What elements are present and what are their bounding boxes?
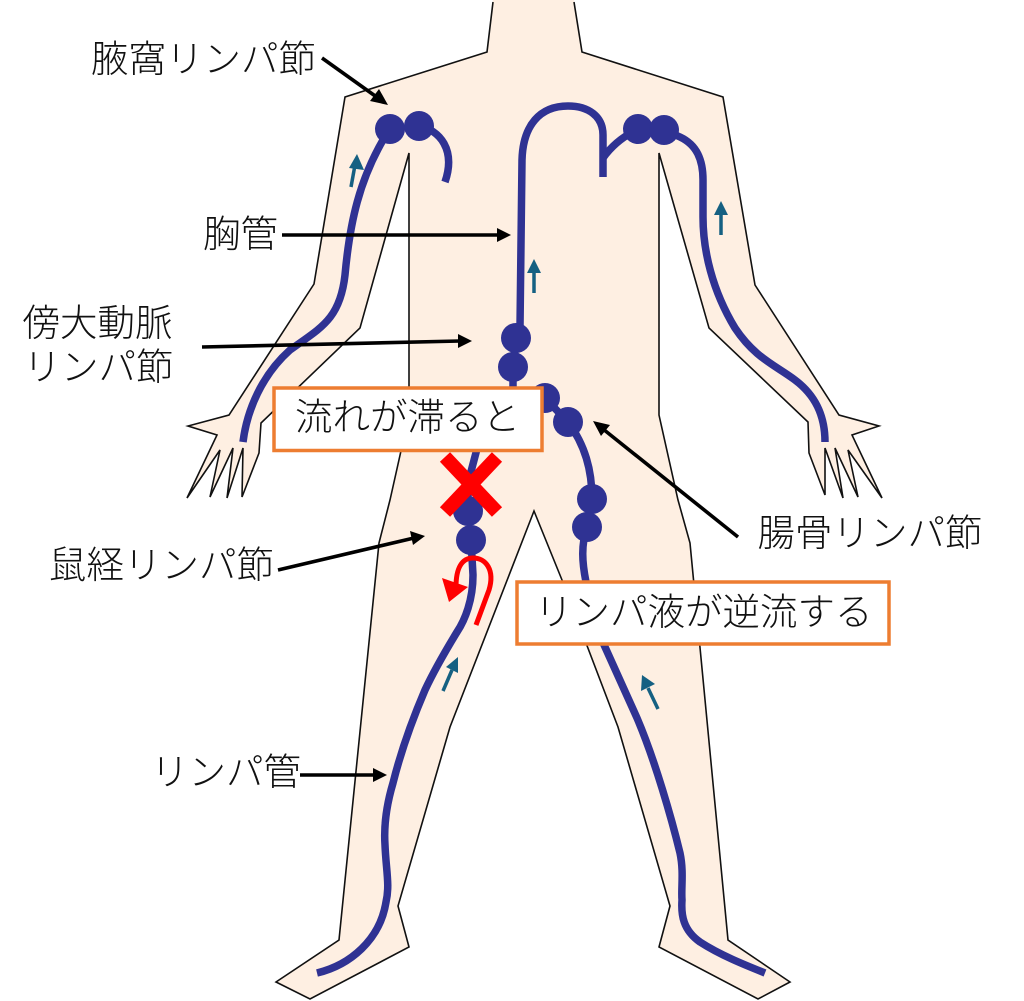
label: thoracic duct: 胸管	[203, 213, 278, 255]
leader arrow: para-aortic nodes	[202, 334, 472, 348]
callout: lymph backflow	[517, 582, 889, 644]
leader arrow: thoracic duct	[282, 228, 511, 242]
label: para-aortic lymph nodes: リンパ節	[24, 346, 174, 388]
red backflow arrow	[442, 558, 491, 625]
flow arrows	[349, 154, 728, 709]
red X: blockage	[445, 457, 497, 512]
label: axillary lymph nodes: 腋窩リンパ節	[91, 38, 316, 80]
lymph vessels	[243, 106, 825, 973]
lymph nodes	[375, 111, 679, 555]
callout: when flow stagnates: 流れが滞ると	[295, 396, 520, 438]
callout: when flow stagnates	[274, 388, 542, 450]
label: para-aortic lymph nodes: 傍大動脈	[22, 302, 172, 344]
callout: lymph backflow: リンパ液が逆流する	[535, 591, 872, 633]
body silhouette	[187, 0, 882, 999]
leader arrow: lymph vessel	[300, 768, 387, 782]
leader arrow: axillary nodes	[322, 58, 388, 105]
label: inguinal lymph nodes: 鼠経リンパ節	[49, 544, 274, 586]
leader arrow: iliac nodes	[593, 421, 738, 537]
label: lymph vessel: リンパ管	[151, 751, 301, 793]
label: para-aortic lymph nodes	[22, 302, 174, 388]
label: iliac lymph nodes: 腸骨リンパ節	[758, 512, 982, 554]
leader arrow: inguinal nodes	[278, 531, 425, 570]
